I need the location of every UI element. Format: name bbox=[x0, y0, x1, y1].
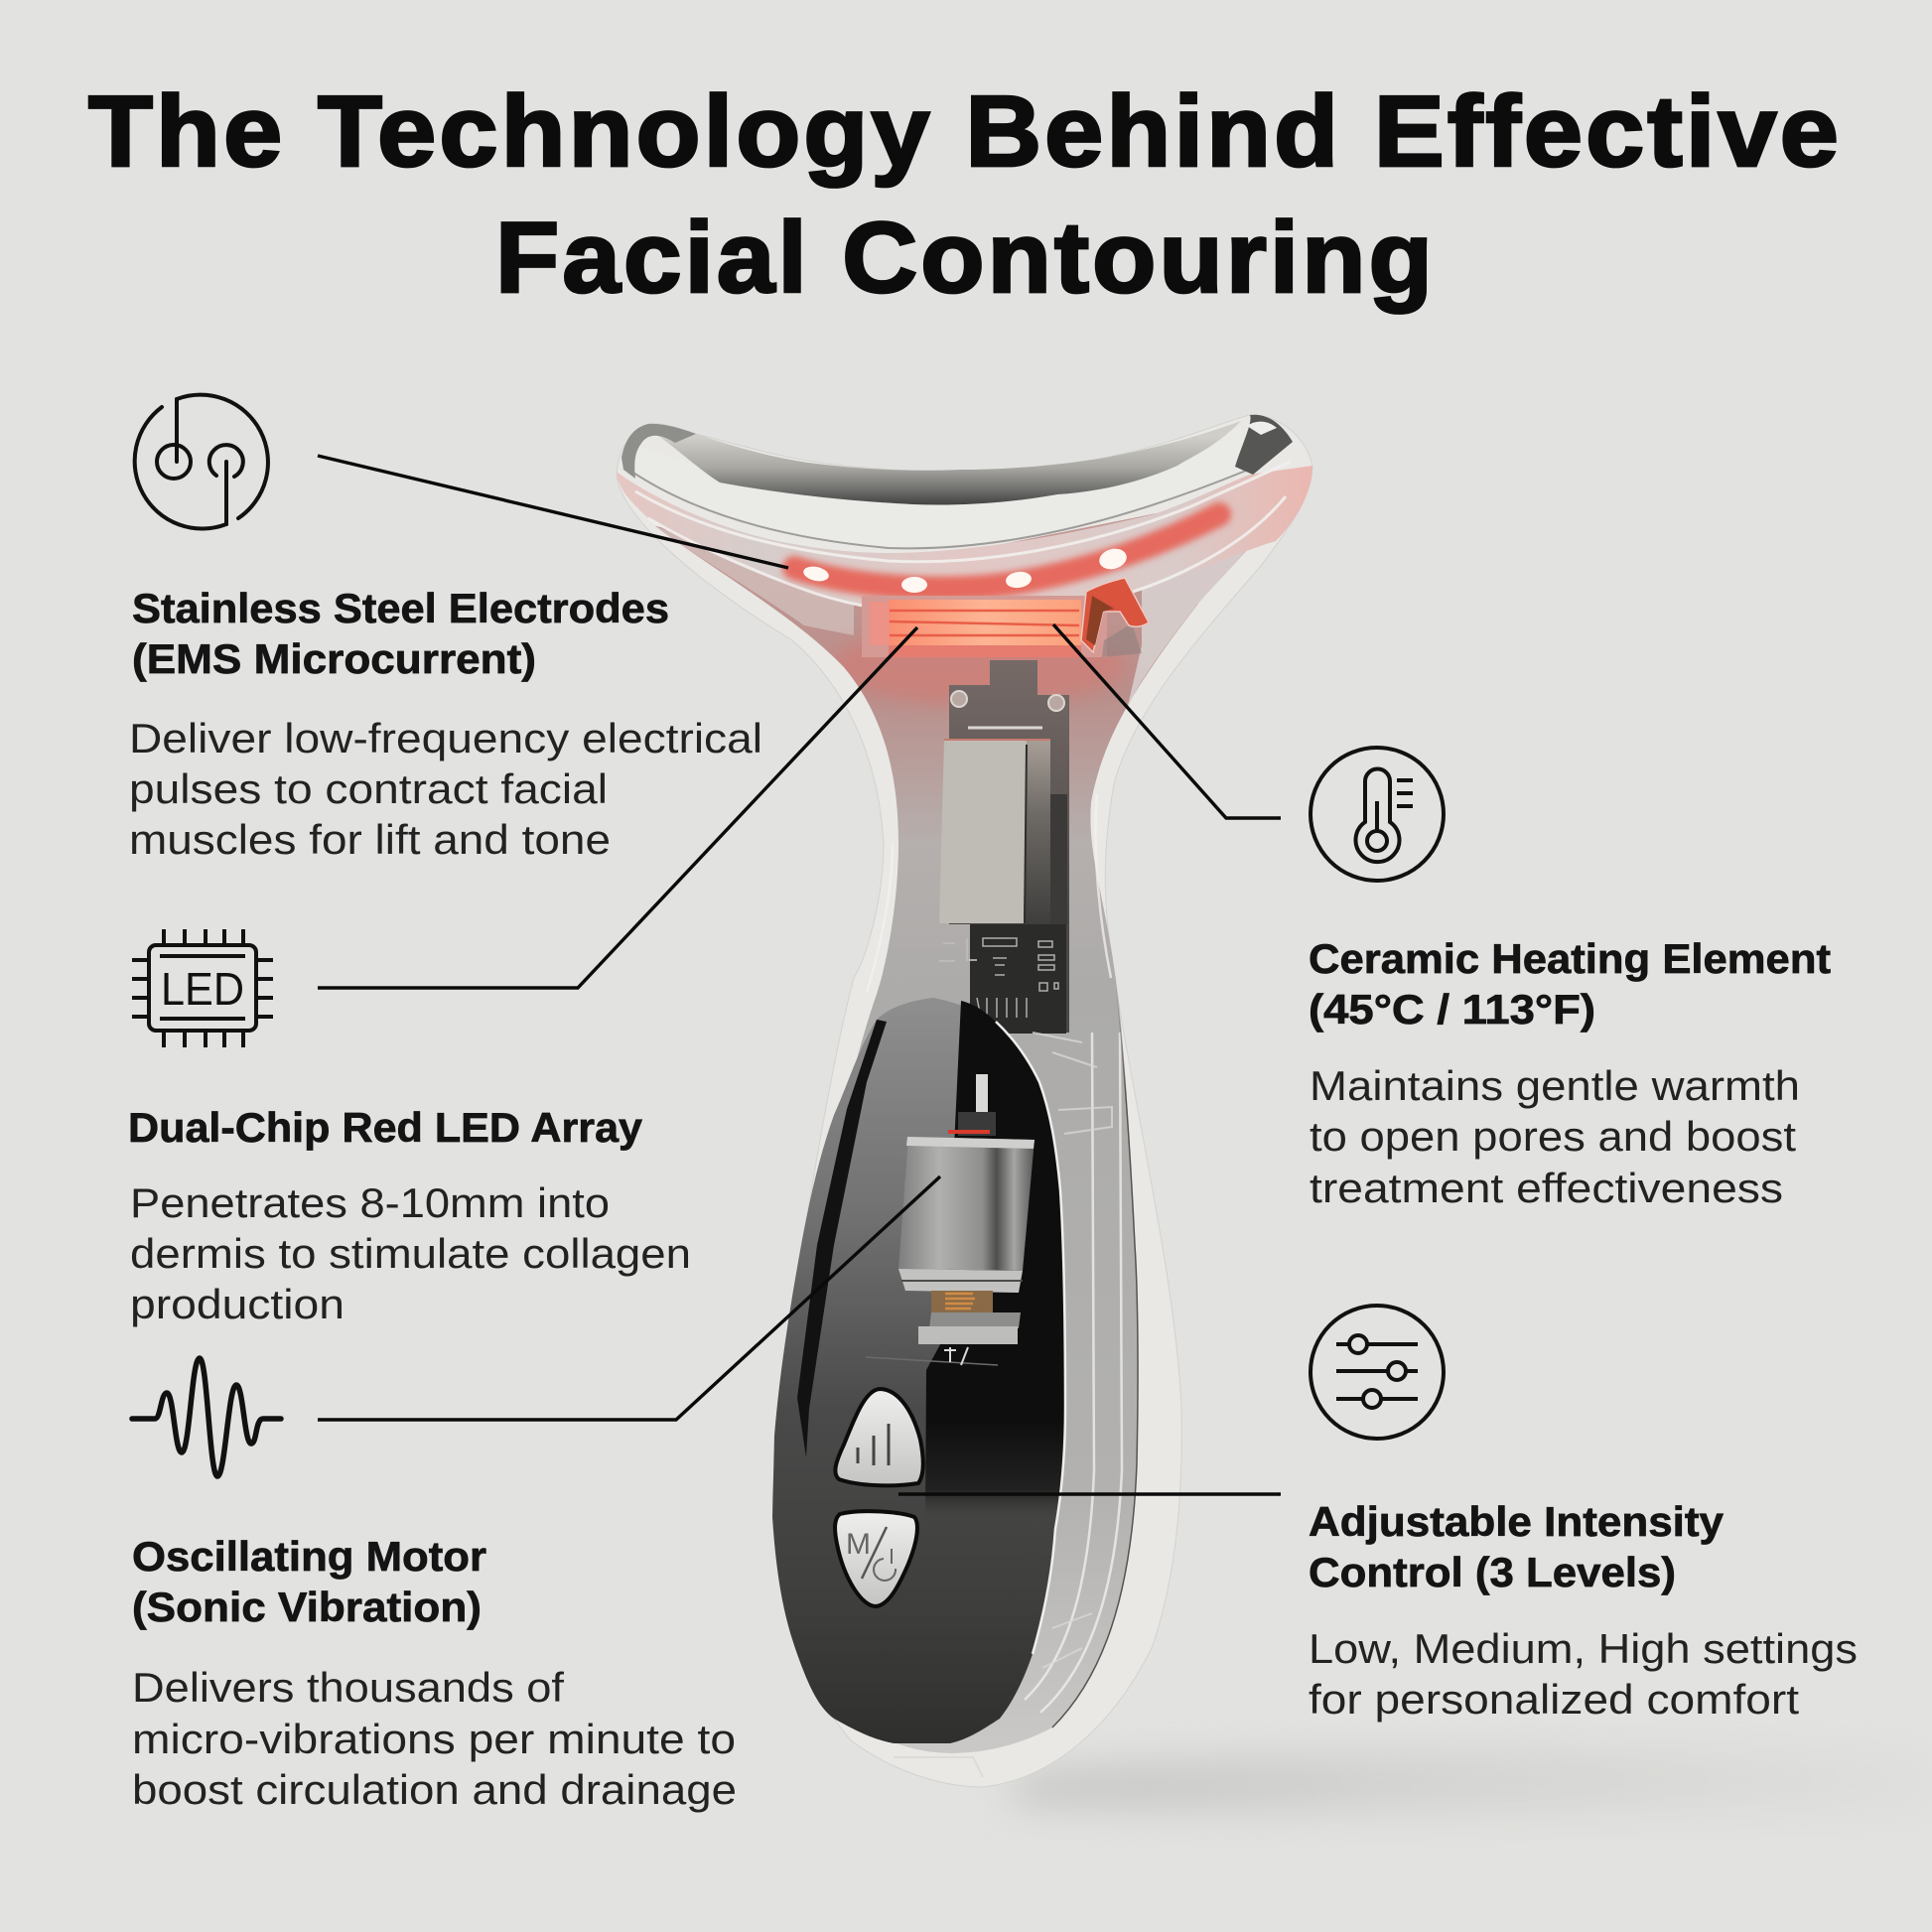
white gap between electrode and strip bbox=[625, 426, 1246, 548]
text: intensity control: for personalized comfort bbox=[1309, 1676, 1799, 1723]
panel side clear detail bbox=[894, 1033, 1112, 1777]
text: led array: production bbox=[130, 1281, 345, 1327]
panel black right reflection bbox=[925, 1001, 1065, 1529]
text: electrodes: Stainless Steel Electrodes bbox=[132, 585, 669, 631]
text: electrodes: muscles for lift and tone bbox=[129, 816, 611, 863]
icon: vibration wave bbox=[132, 1358, 281, 1476]
text: electrodes: pulses to contract facial bbox=[129, 765, 608, 812]
leader line: heating element bbox=[1053, 624, 1281, 818]
text: motor: Oscillating Motor bbox=[132, 1533, 486, 1580]
text: heating element: to open pores and boost bbox=[1310, 1113, 1796, 1160]
text: heating element: Maintains gentle warmth bbox=[1310, 1062, 1800, 1109]
text: heating element: (45°C / 113°F) bbox=[1309, 986, 1595, 1033]
text: led array: dermis to stimulate collagen bbox=[130, 1230, 691, 1277]
clear strip under electrode bbox=[617, 466, 1312, 617]
copper coil bbox=[931, 1291, 993, 1312]
electrode white left end bbox=[621, 424, 696, 479]
text: led array bbox=[128, 1104, 691, 1327]
motor lower ring bbox=[898, 1269, 1023, 1293]
mode power button bbox=[835, 1511, 917, 1606]
icon: sliders bbox=[1311, 1306, 1444, 1439]
text: motor: Delivers thousands of bbox=[132, 1664, 564, 1711]
ceramic heating plate bbox=[862, 596, 1107, 657]
cavity lighter right corner bbox=[1127, 491, 1286, 710]
pcb components bbox=[977, 938, 1058, 1018]
text: electrodes: Deliver low-frequency electrical bbox=[129, 715, 762, 761]
title: Facial Contouring bbox=[495, 203, 1436, 314]
leader line: electrodes bbox=[318, 456, 788, 568]
glow below heating plate bbox=[832, 639, 1124, 705]
strip highlight lines bbox=[635, 462, 1291, 617]
shell seam lines bbox=[867, 794, 1122, 1713]
text: motor: micro-vibrations per minute to bbox=[132, 1716, 736, 1762]
leader line: led array bbox=[318, 627, 917, 988]
battery module bbox=[939, 740, 1067, 924]
icon: led chip: LED bbox=[161, 963, 244, 1015]
clip frame bbox=[1102, 623, 1142, 657]
red ring bbox=[948, 1130, 990, 1134]
electrode right end bbox=[1235, 415, 1293, 475]
cavity lighter left corner bbox=[655, 526, 854, 635]
intensity button bbox=[835, 1389, 923, 1485]
shell right dark edge bbox=[1052, 973, 1138, 1727]
leader line: motor bbox=[318, 1176, 940, 1420]
pcb ghost components left bbox=[939, 938, 977, 961]
title: The Technology Behind Effective bbox=[88, 76, 1842, 188]
text: intensity control: Control (3 Levels) bbox=[1309, 1549, 1676, 1595]
ground shadow bbox=[1013, 1748, 1932, 1813]
text: led array: Penetrates 8-10mm into bbox=[130, 1179, 610, 1226]
panel right edge highlight bbox=[996, 1022, 1065, 1654]
text: motor bbox=[132, 1533, 737, 1813]
device outer shell bbox=[617, 415, 1312, 1787]
product: facial contouring device bbox=[617, 415, 1312, 1787]
led lights bbox=[802, 546, 1129, 593]
text: electrodes: (EMS Microcurrent) bbox=[132, 635, 536, 682]
vibration motor bbox=[866, 1074, 1035, 1365]
text: intensity control: Low, Medium, High settings bbox=[1309, 1625, 1858, 1672]
text: heating element: Ceramic Heating Element bbox=[1309, 935, 1831, 982]
black control panel bbox=[772, 998, 1065, 1743]
pcb screw left bbox=[951, 691, 967, 707]
title bbox=[88, 76, 1842, 314]
motor shaft bbox=[976, 1074, 988, 1112]
icon: electrodes bbox=[135, 395, 268, 529]
text: motor: boost circulation and drainage bbox=[132, 1766, 737, 1813]
text: motor: (Sonic Vibration) bbox=[132, 1584, 482, 1630]
red reflective clip bbox=[1081, 578, 1149, 652]
panel black left streak bbox=[797, 1020, 887, 1457]
mode power button: M bbox=[846, 1528, 871, 1561]
pcb screw right bbox=[1048, 695, 1064, 711]
text: intensity control bbox=[1309, 1498, 1858, 1723]
text: electrodes bbox=[129, 585, 762, 863]
leader line: intensity control bbox=[898, 1492, 1281, 1496]
text: heating element: treatment effectiveness bbox=[1310, 1165, 1783, 1211]
icon: thermometer bbox=[1311, 748, 1444, 881]
motor mount bbox=[929, 1312, 1021, 1328]
text: heating element bbox=[1309, 935, 1831, 1211]
pcb board bbox=[949, 660, 1069, 1034]
stainless steel electrode bbox=[655, 421, 1241, 505]
motor collar bbox=[958, 1112, 996, 1136]
motor body bbox=[898, 1137, 1035, 1271]
translucent inner cavity bbox=[655, 486, 1288, 1753]
text: intensity control: Adjustable Intensity bbox=[1309, 1498, 1725, 1545]
icon: led chip bbox=[132, 929, 273, 1047]
text: led array: Dual-Chip Red LED Array bbox=[128, 1104, 643, 1151]
red led glow band bbox=[794, 514, 1219, 589]
